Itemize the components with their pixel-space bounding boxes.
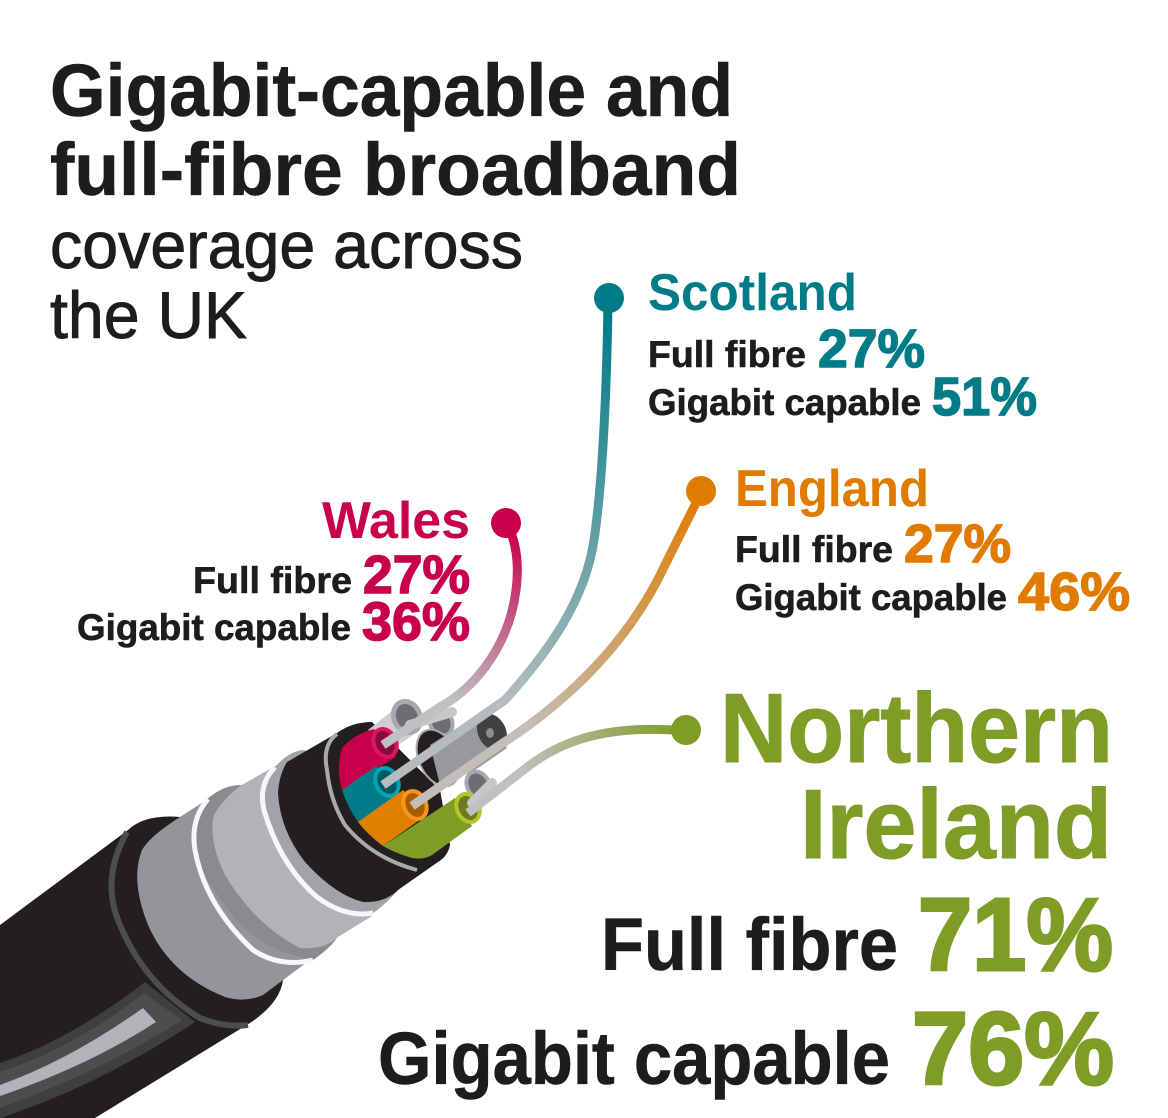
label: Northern Ireland: Full fibre [601,903,898,986]
jacket stripe [0,982,195,1118]
label: Northern Ireland: 76% [912,991,1114,1106]
label: Scotland [648,264,1037,427]
label: Wales: Wales [322,492,470,550]
title: the UK [50,278,247,352]
wire: Scotland [383,283,624,785]
tube: teal [342,764,403,822]
label: Wales: Full fibre [193,560,352,601]
tube: orange [358,787,431,846]
label: Scotland: 51% [932,367,1037,427]
label: Northern Ireland: Northern [720,673,1113,783]
label: Wales: Gigabit capable [77,607,351,648]
wire: Northern Ireland [468,715,701,813]
dark collar [193,785,340,960]
title: Gigabit-capable and [50,49,733,132]
tube: green [383,790,484,859]
white ring two [262,767,373,914]
label: England: 27% [904,514,1011,574]
label: Northern Ireland: Ireland [800,769,1112,879]
rear tube: grey centre [430,712,507,785]
label: Scotland: Gigabit capable [648,382,921,423]
label: Wales: 36% [362,592,470,652]
rear tubes [368,697,513,802]
rear tube: light [368,707,420,752]
label: Scotland: Scotland [648,264,857,322]
title [50,49,741,352]
label: Scotland: 27% [818,319,925,379]
short fibres [410,712,492,803]
label: Wales: 27% [363,545,470,605]
label: England: Full fibre [735,529,893,570]
tube: pink [339,725,401,790]
label: England: England [735,460,929,518]
label: England: 46% [1018,562,1130,622]
label: Scotland: Full fibre [648,334,806,375]
light sheath [212,765,372,948]
label: Northern Ireland [378,673,1114,1106]
illustration: fibre optic cable [0,697,513,1118]
wire: England [412,476,716,806]
label: Northern Ireland: 71% [918,877,1113,992]
grey lip [263,750,400,913]
inner ring [326,734,417,870]
outer black jacket [0,817,283,1118]
label: Northern Ireland: Gigabit capable [378,1017,890,1100]
label: England: Gigabit capable [735,577,1007,618]
title: full-fibre broadband [50,128,741,211]
white ring one [194,799,313,962]
title: coverage across [50,208,523,282]
jacket ring [111,832,248,1026]
wire: Wales [383,508,521,745]
grey sheath [137,788,330,1000]
black core [278,722,450,902]
label: Wales [77,492,470,652]
label: England [735,460,1130,622]
